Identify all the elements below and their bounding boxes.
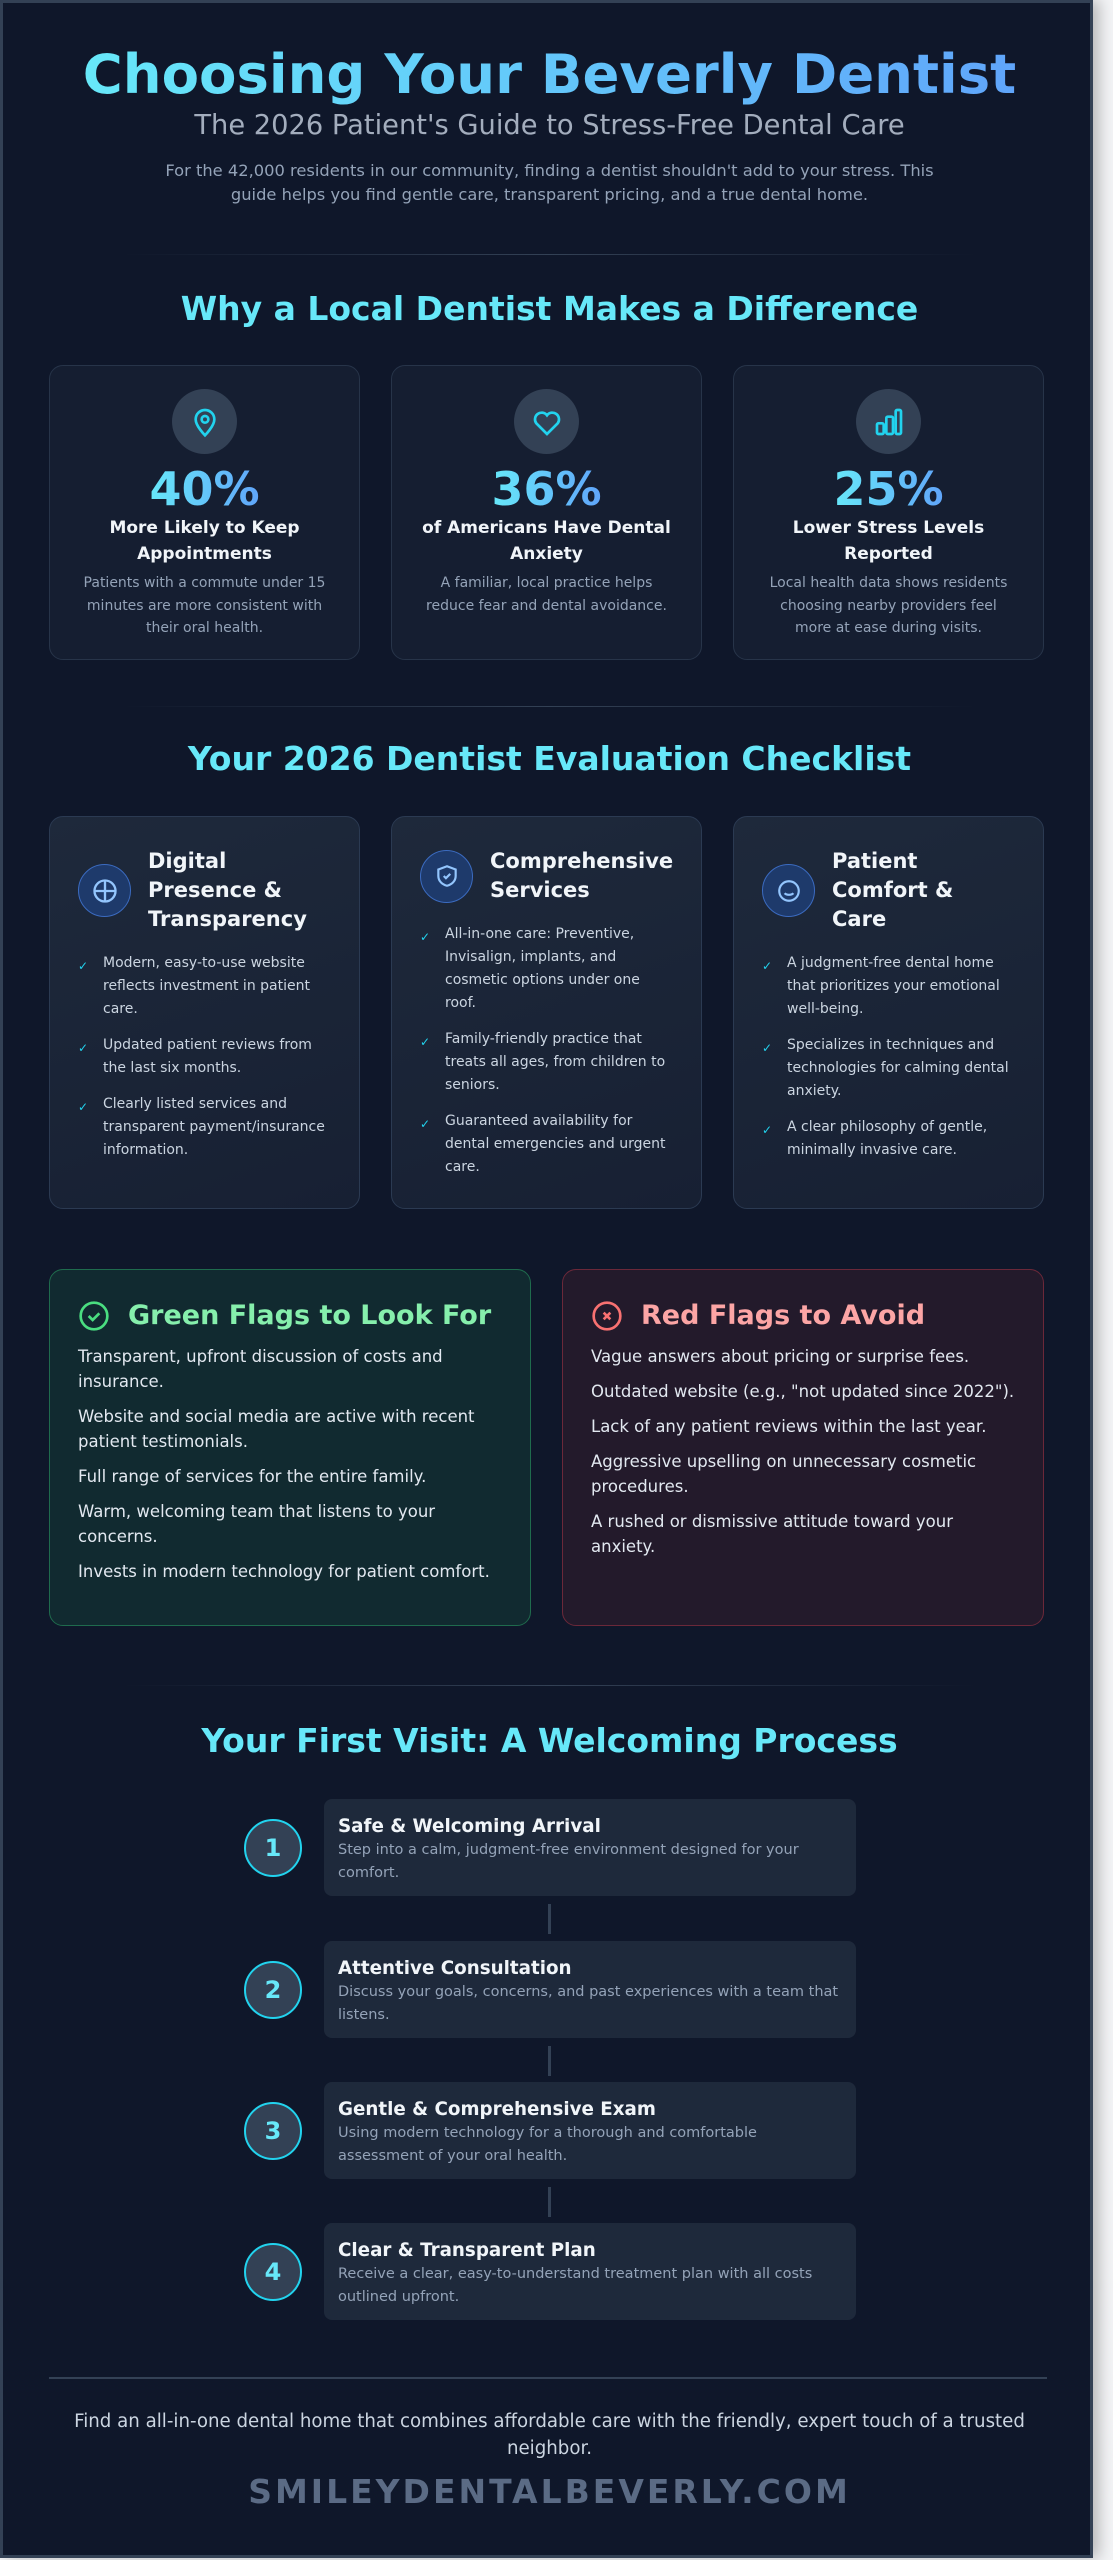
panel: red flags: Red Flags to Avoid bbox=[641, 1300, 925, 1331]
checklist card: services: Comprehensive bbox=[490, 849, 673, 873]
checklist card: services: Family-friendly practice that treats all ages, from children to seniors. bbox=[445, 1031, 665, 1093]
step 1 bbox=[244, 1799, 856, 1896]
stat card 2 bbox=[391, 365, 702, 660]
checklist card: digital: Modern, easy-to-use website reflects investment in patient care. bbox=[103, 955, 310, 1017]
icon: bar chart bbox=[856, 389, 921, 454]
stat card 2: of Americans Have Dental Anxiety bbox=[422, 518, 671, 564]
stat card 3: Local health data shows residents choosing nearby providers feel more at ease during visits. bbox=[770, 575, 1007, 636]
checklist card: digital: Updated patient reviews from the last six months. bbox=[103, 1037, 312, 1076]
checklist card: comfort: A clear philosophy of gentle, minimally invasive care. bbox=[787, 1119, 987, 1158]
text: 2 bbox=[265, 1976, 281, 2004]
icon: check circle bbox=[79, 1301, 109, 1331]
panel: red flags: Outdated website (e.g., "not updated since 2022"). bbox=[591, 1382, 1014, 1401]
stat card 3 bbox=[733, 365, 1044, 660]
intro text: For the 42,000 residents in our community, finding a dentist shouldn't add to your stress. This guide helps you find gentle care, transparent pricing, and a true dental home. bbox=[165, 161, 934, 204]
panel: green flags: Website and social media are active with recent patient testimonials. bbox=[78, 1407, 475, 1451]
icon: location pin bbox=[172, 389, 237, 454]
panel: red flags bbox=[562, 1269, 1044, 1626]
text: Clear & Transparent Plan bbox=[338, 2240, 596, 2261]
heading: why local: Why a Local Dentist Makes a Difference bbox=[181, 289, 918, 328]
text: 4 bbox=[265, 2258, 281, 2286]
step 3 bbox=[244, 2082, 856, 2179]
panel: green flags: Warm, welcoming team that listens to your concerns. bbox=[78, 1502, 435, 1546]
text: Receive a clear, easy-to-understand treatment plan with all costs outlined upfront. bbox=[338, 2266, 812, 2305]
icon: heart bbox=[514, 389, 579, 454]
heading: first visit: Your First Visit: A Welcoming Process bbox=[201, 1721, 898, 1760]
text: Safe & Welcoming Arrival bbox=[338, 1816, 601, 1837]
subtitle: The 2026 Patient's Guide to Stress-Free Dental Care bbox=[194, 110, 905, 141]
panel: green flags: Full range of services for the entire family. bbox=[78, 1467, 426, 1486]
panel: green flags bbox=[49, 1269, 531, 1626]
checklist card: services: Services bbox=[490, 878, 590, 902]
icon: smile bbox=[762, 864, 815, 917]
step 4 bbox=[244, 2223, 856, 2320]
text: Discuss your goals, concerns, and past experiences with a team that listens. bbox=[338, 1984, 838, 2023]
checklist card: digital: Digital bbox=[148, 849, 226, 873]
step 2 bbox=[244, 1941, 856, 2038]
title: Choosing Your Beverly Dentist bbox=[83, 42, 1016, 106]
panel: red flags: Vague answers about pricing or surprise fees. bbox=[591, 1347, 969, 1366]
footer url: SMILEYDENTALBEVERLY.COM bbox=[248, 2472, 851, 2511]
icon: globe bbox=[78, 864, 131, 917]
stat card 2: 36% bbox=[491, 462, 602, 516]
icon: shield bbox=[420, 850, 473, 902]
checklist card: comfort: A judgment-free dental home that prioritizes your emotional well-being. bbox=[787, 955, 1000, 1017]
checklist card: services bbox=[391, 816, 702, 1209]
panel: green flags: Invests in modern technology for patient comfort. bbox=[78, 1562, 490, 1581]
checklist card: comfort: Specializes in techniques and technologies for calming dental anxiety. bbox=[787, 1037, 1009, 1099]
stat card 1 bbox=[49, 365, 360, 660]
checklist card: comfort: Comfort & bbox=[832, 878, 953, 902]
checklist card: digital: Presence & bbox=[148, 878, 282, 902]
checklist card: comfort bbox=[733, 816, 1044, 1209]
text: Attentive Consultation bbox=[338, 1958, 572, 1979]
panel: red flags: A rushed or dismissive attitude toward your anxiety. bbox=[591, 1512, 953, 1556]
stat card 1: Patients with a commute under 15 minutes are more consistent with their oral health. bbox=[84, 575, 325, 636]
panel: green flags: Transparent, upfront discussion of costs and insurance. bbox=[78, 1347, 443, 1391]
panel: red flags: Aggressive upselling on unnecessary cosmetic procedures. bbox=[591, 1452, 976, 1496]
footer text: Find an all-in-one dental home that combines affordable care with the friendly, expert touch of a trusted neighbor. bbox=[74, 2411, 1025, 2459]
stat card 1: More Likely to Keep Appointments bbox=[109, 518, 300, 564]
text: 1 bbox=[265, 1834, 281, 1862]
checklist card: digital: Transparency bbox=[148, 907, 307, 931]
stat card 3: Lower Stress Levels Reported bbox=[793, 518, 984, 564]
text: Gentle & Comprehensive Exam bbox=[338, 2099, 656, 2120]
stat card 2: A familiar, local practice helps reduce fear and dental avoidance. bbox=[426, 575, 667, 614]
text: Using modern technology for a thorough and comfortable assessment of your oral health. bbox=[338, 2125, 757, 2164]
checklist card: digital bbox=[49, 816, 360, 1209]
panel: red flags: Lack of any patient reviews within the last year. bbox=[591, 1417, 986, 1436]
checklist card: comfort: Care bbox=[832, 907, 886, 931]
text: Step into a calm, judgment-free environment designed for your comfort. bbox=[338, 1842, 799, 1881]
text: 3 bbox=[265, 2117, 281, 2145]
checklist card: services: All-in-one care: Preventive, Invisalign, implants, and cosmetic options under one roof. bbox=[445, 926, 640, 1011]
icon: x circle bbox=[592, 1301, 622, 1331]
panel: green flags: Green Flags to Look For bbox=[128, 1300, 491, 1331]
checklist card: services: Guaranteed availability for dental emergencies and urgent care. bbox=[445, 1113, 666, 1175]
heading: checklist: Your 2026 Dentist Evaluation Checklist bbox=[188, 739, 911, 778]
checklist card: comfort: Patient bbox=[832, 849, 917, 873]
stat card 3: 25% bbox=[833, 462, 944, 516]
checklist card: digital: Clearly listed services and transparent payment/insurance information. bbox=[103, 1096, 325, 1158]
stat card 1: 40% bbox=[149, 462, 260, 516]
